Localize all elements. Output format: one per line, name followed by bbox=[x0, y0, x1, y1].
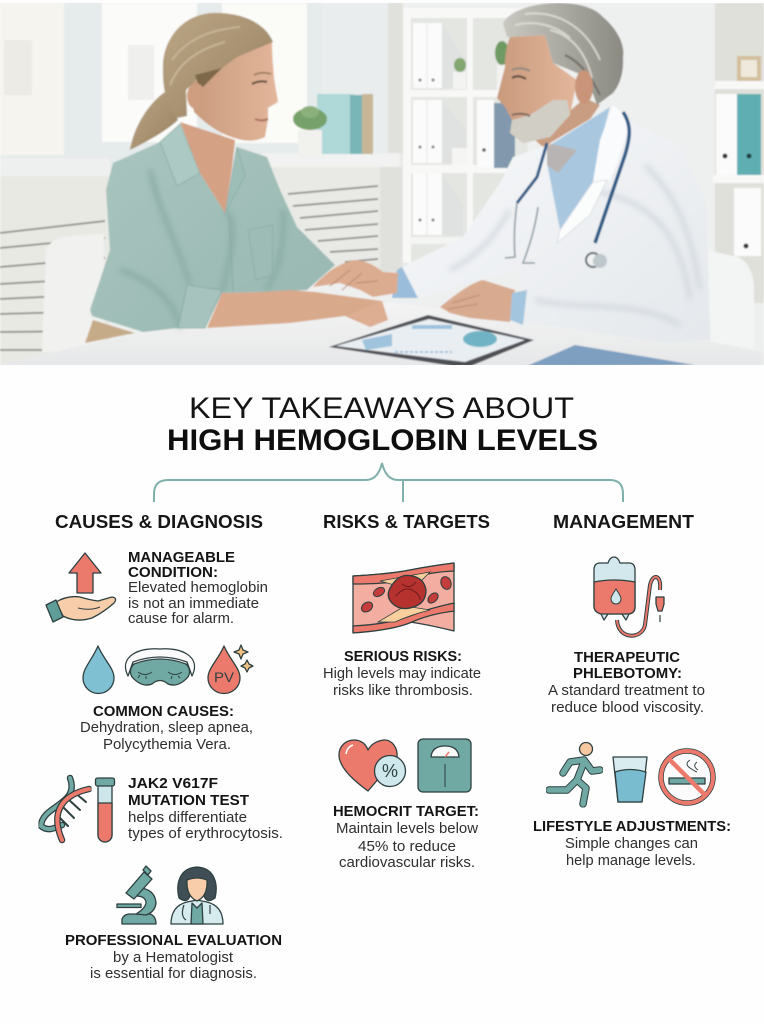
icon: dna helix bbox=[41, 778, 89, 840]
column heading: causes and diagnosis: CAUSES & DIAGNOSIS bbox=[55, 511, 263, 532]
connector bracket bbox=[154, 463, 623, 502]
table bbox=[104, 342, 763, 365]
text: professional evaluation: by a Hematologist bbox=[113, 949, 234, 966]
text: hemocrit target: 45% to reduce bbox=[358, 838, 456, 855]
icon: polycythemia vera drop: PV bbox=[214, 669, 235, 685]
column heading: risks and targets: RISKS & TARGETS bbox=[323, 511, 490, 532]
icon: water drop bbox=[83, 646, 114, 694]
icon: glass of water bbox=[613, 757, 647, 802]
text: common causes: Dehydration, sleep apnea, bbox=[80, 719, 253, 736]
icon: running person bbox=[549, 742, 600, 804]
title: KEY TAKEAWAYS ABOUT bbox=[189, 392, 574, 425]
text: jak2 mutation test: JAK2 V617F bbox=[128, 776, 218, 792]
text: jak2 mutation test bbox=[128, 776, 283, 842]
text: common causes bbox=[80, 704, 253, 753]
sill and radiator bbox=[0, 153, 403, 366]
text: jak2 mutation test: MUTATION TEST bbox=[128, 793, 249, 809]
icon: no smoking bbox=[661, 751, 713, 803]
text: serious risks bbox=[323, 649, 481, 699]
blue folder bbox=[527, 345, 695, 366]
text: serious risks: SERIOUS RISKS: bbox=[344, 649, 462, 665]
binders and plant on sill bbox=[293, 94, 373, 157]
text: lifestyle adjustments bbox=[533, 819, 731, 869]
icon: polycythemia vera drop bbox=[208, 645, 253, 694]
text: therapeutic phlebotomy: PHLEBOTOMY: bbox=[573, 666, 682, 682]
text: lifestyle adjustments: Simple changes can bbox=[565, 835, 698, 852]
icon: heart with percent bbox=[339, 740, 406, 791]
text: manageable condition: cause for alarm. bbox=[128, 610, 234, 627]
shelves bbox=[403, 8, 528, 270]
title: HIGH HEMOGLOBIN LEVELS bbox=[167, 424, 598, 457]
text: common causes: Polycythemia Vera. bbox=[103, 736, 231, 753]
icon: hand with rising arrow bbox=[46, 553, 116, 622]
icon: blood test tube bbox=[96, 778, 114, 842]
text: manageable condition bbox=[128, 550, 268, 627]
column heading: management: MANAGEMENT bbox=[553, 511, 695, 532]
icon: microscope bbox=[117, 866, 156, 924]
icon: heart with percent: % bbox=[382, 761, 398, 781]
text: serious risks: High levels may indicate bbox=[323, 665, 481, 682]
text: hemocrit target bbox=[333, 804, 479, 871]
right shelves bbox=[713, 3, 764, 303]
window bbox=[5, 3, 403, 153]
doctor bbox=[313, 3, 710, 342]
text: serious risks: risks like thrombosis. bbox=[333, 682, 473, 699]
icon: blood bag with tube bbox=[594, 557, 664, 636]
woman bbox=[85, 13, 388, 343]
photo: patient and doctor consultation bbox=[0, 0, 764, 368]
text: lifestyle adjustments: LIFESTYLE ADJUSTMENTS: bbox=[533, 819, 731, 835]
text: therapeutic phlebotomy: reduce blood viscosity. bbox=[551, 699, 704, 716]
icon: blood clot in vessel bbox=[353, 563, 454, 633]
title bbox=[167, 392, 598, 457]
icon: hematologist bbox=[171, 867, 223, 924]
chairs bbox=[42, 234, 754, 352]
text: therapeutic phlebotomy: A standard treatment to bbox=[548, 682, 705, 699]
text: hemocrit target: Maintain levels below bbox=[336, 820, 478, 837]
text: therapeutic phlebotomy bbox=[548, 650, 705, 716]
tablet with charts bbox=[329, 315, 534, 368]
text: professional evaluation bbox=[65, 933, 282, 982]
text: jak2 mutation test: types of erythrocytosis. bbox=[128, 825, 283, 842]
text: common causes: COMMON CAUSES: bbox=[93, 704, 234, 720]
text: professional evaluation: is essential for diagnosis. bbox=[90, 965, 257, 982]
text: manageable condition: Elevated hemoglobin bbox=[128, 579, 268, 596]
text: hemocrit target: cardiovascular risks. bbox=[339, 854, 475, 871]
text: manageable condition: is not an immediate bbox=[128, 595, 259, 612]
text: manageable condition: CONDITION: bbox=[128, 565, 218, 581]
icon: weighing scale bbox=[418, 739, 471, 792]
icon: sleep mask bbox=[126, 649, 194, 685]
text: manageable condition: MANAGEABLE bbox=[128, 550, 235, 566]
text: hemocrit target: HEMOCRIT TARGET: bbox=[333, 804, 479, 820]
text: lifestyle adjustments: help manage levels. bbox=[566, 852, 696, 869]
text: jak2 mutation test: helps differentiate bbox=[128, 809, 247, 826]
text: therapeutic phlebotomy: THERAPEUTIC bbox=[574, 650, 681, 666]
text: professional evaluation: PROFESSIONAL EVALUATION bbox=[65, 933, 282, 949]
